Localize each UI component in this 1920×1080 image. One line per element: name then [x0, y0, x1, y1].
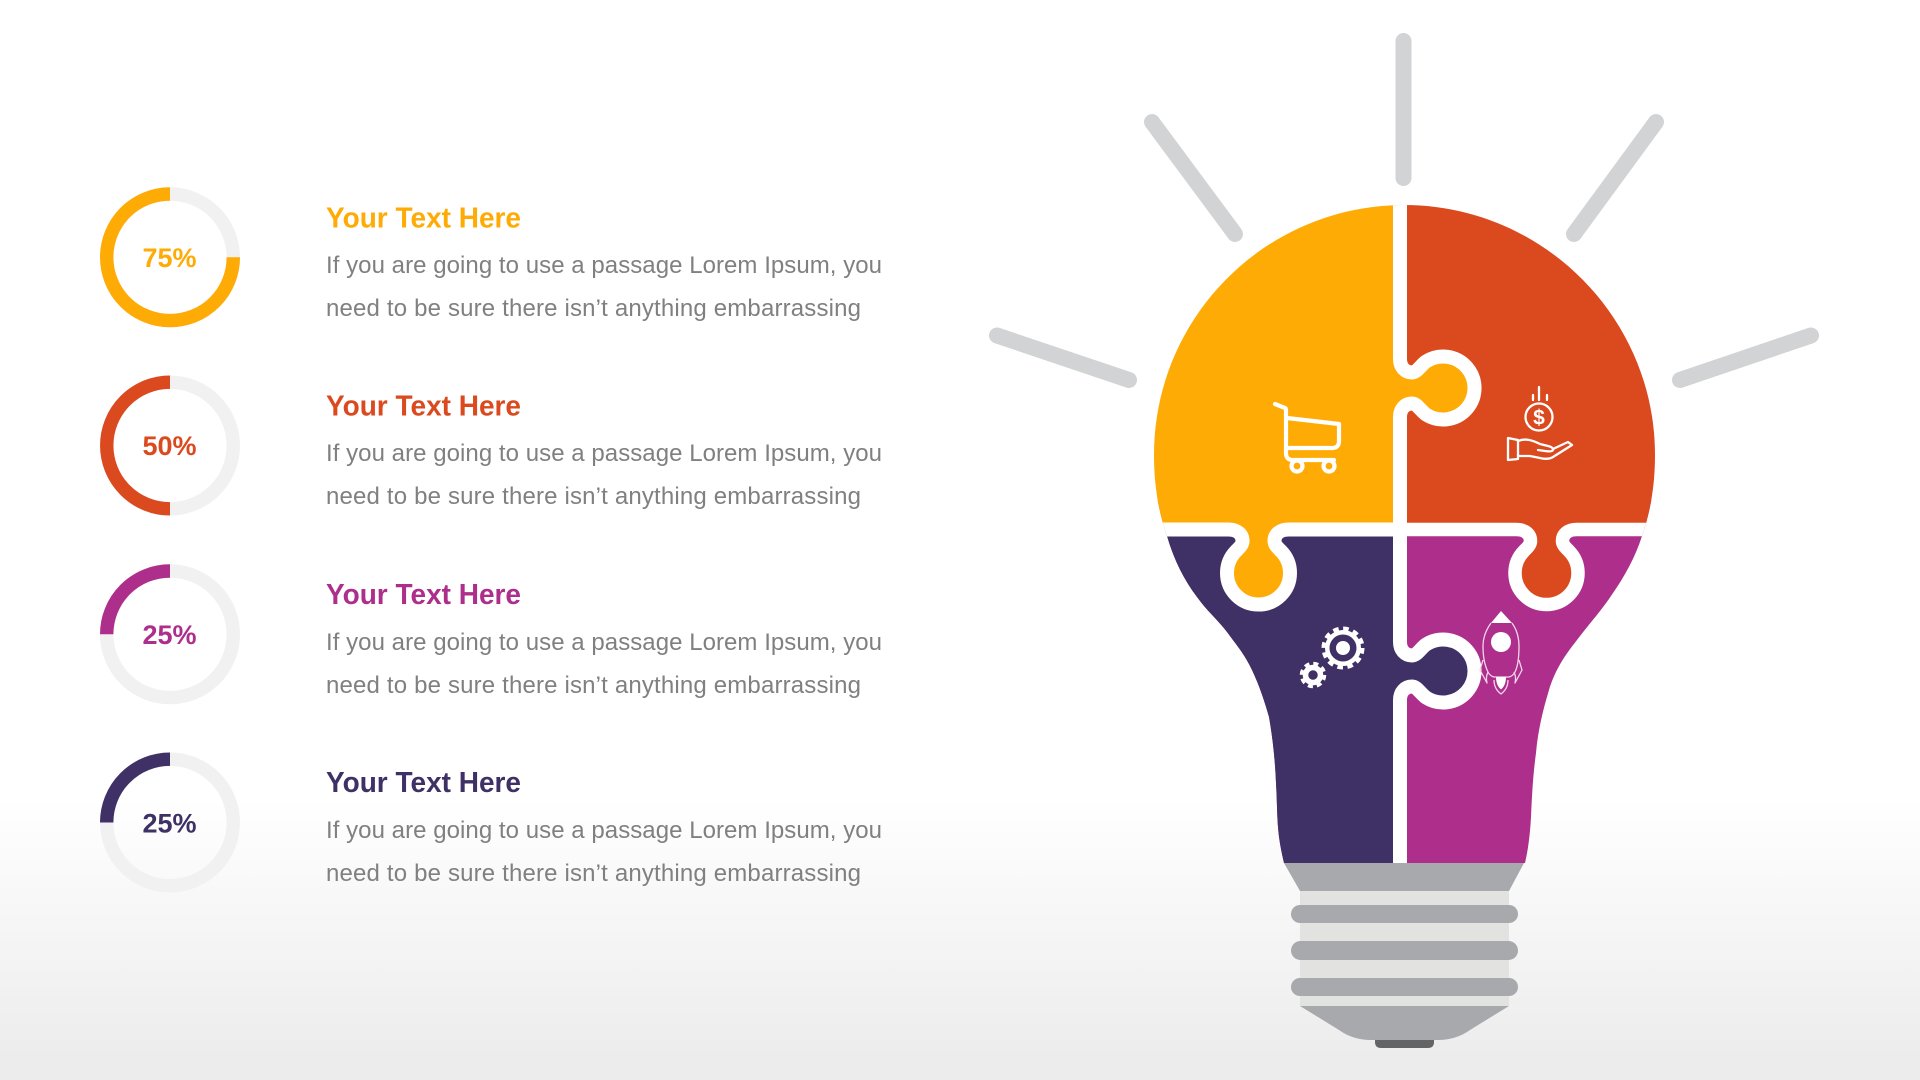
- donut chart 25% magenta: 25%: [142, 620, 197, 650]
- donut chart 25% navy: [107, 759, 233, 886]
- body text 1: [326, 252, 882, 322]
- row 1: 75%: [107, 194, 882, 322]
- row 4: 25%: [107, 759, 882, 887]
- row 2: 50%: [107, 382, 882, 510]
- body text 4: [326, 817, 882, 887]
- donut chart 50%: [107, 382, 233, 509]
- heading 4: Your Text Here: [326, 767, 521, 799]
- thread band 1: [1291, 905, 1518, 923]
- body text 3: If you are going to use a passage Lorem Ipsum, you: [326, 629, 882, 656]
- donut chart 75%: [107, 194, 233, 321]
- body text 2: If you are going to use a passage Lorem Ipsum, you: [326, 440, 882, 467]
- heading 1: Your Text Here: [326, 202, 521, 234]
- puzzle bulb: [1154, 205, 1655, 863]
- body text 2: [326, 440, 882, 510]
- base top collar: [1284, 863, 1524, 891]
- heading 2: Your Text Here: [326, 390, 521, 422]
- thread band 3: [1291, 978, 1518, 996]
- thread band 2: [1291, 941, 1518, 960]
- base bottom taper: [1300, 1006, 1509, 1040]
- donut chart 25% navy: 25%: [142, 808, 197, 838]
- body text 3: [326, 629, 882, 699]
- icon: coin over hand: $: [1533, 406, 1545, 430]
- body text 4: need to be sure there isn’t anything embarrassing: [326, 860, 861, 887]
- icon: rocket: [1480, 611, 1522, 694]
- donut chart 50%: 50%: [142, 431, 197, 461]
- base tip: [1375, 1040, 1434, 1048]
- heading 3: Your Text Here: [326, 579, 521, 611]
- body text 2: need to be sure there isn’t anything embarrassing: [326, 483, 861, 510]
- body text 3: need to be sure there isn’t anything embarrassing: [326, 672, 861, 699]
- base thread background: [1300, 891, 1509, 1006]
- icon: coin over hand: [1508, 387, 1572, 460]
- donut chart 25% magenta: [107, 571, 233, 698]
- body text 4: If you are going to use a passage Lorem Ipsum, you: [326, 817, 882, 844]
- donut chart 75%: 75%: [142, 243, 197, 273]
- puzzle piece: yellow: [1154, 205, 1482, 612]
- light rays: [997, 41, 1811, 380]
- icon: shopping cart: [1275, 404, 1339, 472]
- row 3: 25%: [107, 571, 882, 699]
- puzzle piece: navy: [1163, 524, 1482, 863]
- puzzle piece: magenta: [1158, 500, 1652, 863]
- puzzle piece: red: [1406, 205, 1655, 612]
- body text 1: If you are going to use a passage Lorem Ipsum, you: [326, 252, 882, 279]
- bulb screw base: [1284, 863, 1524, 1048]
- icon: gears: [1302, 629, 1362, 686]
- body text 1: need to be sure there isn’t anything embarrassing: [326, 295, 861, 322]
